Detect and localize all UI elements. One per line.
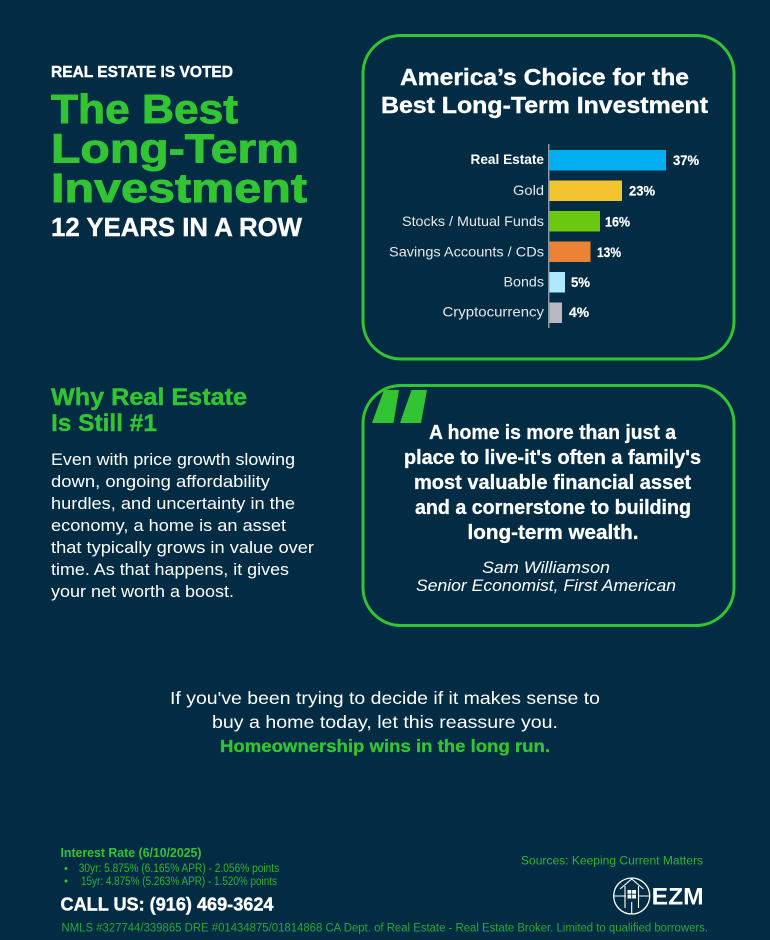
quote text: long-term wealth.: [468, 522, 638, 544]
sources: Sources: Keeping Current Matters: [521, 856, 703, 868]
heading: why real estate is still #1: Is Still #1: [51, 410, 157, 437]
bar chart: [389, 144, 700, 328]
text block: why explanation: hurdles, and uncertainty in the: [51, 495, 295, 513]
bar chart: 16%: [605, 214, 630, 230]
icon: EZM logo: EZM: [652, 884, 704, 910]
icon: quotation marks: [372, 390, 427, 423]
text block: why explanation: that typically grows in value over: [51, 539, 315, 557]
bar chart: 5%: [571, 274, 591, 290]
chart title: America’s Choice for the: [400, 64, 689, 90]
chart title: Best Long-Term Investment: [381, 92, 708, 118]
quote attribution: Senior Economist, First American: [416, 576, 676, 595]
bar chart: 37%: [673, 152, 700, 168]
bar chart: Stocks / Mutual Funds: [402, 213, 544, 229]
bar chart: Bonds: [504, 274, 544, 290]
text block: closing message: [170, 688, 600, 756]
text block: closing message: If you've been trying to decide if it makes sense to: [170, 688, 600, 708]
text block: interest rates: [60, 846, 279, 888]
text block: why explanation: Even with price growth slowing: [51, 451, 295, 469]
panel: America's choice chart: [363, 36, 734, 359]
call to action phone number: CALL US: (916) 469-3624: [60, 894, 274, 914]
bar chart: Cryptocurrency: [442, 304, 544, 320]
heading: real estate is voted the best long-term investment: [51, 64, 307, 242]
text block: why explanation: your net worth a boost.: [51, 583, 234, 601]
text block: interest rates: Interest Rate (6/10/2025): [60, 846, 202, 860]
text block: interest rates: 30yr: 5.875% (6.165% APR) - 2.056% points: [79, 863, 279, 875]
panel: quote: [363, 386, 734, 626]
heading: why real estate is still #1: Why Real Estate: [51, 384, 247, 411]
bar chart: Gold: [513, 182, 544, 198]
bar chart: 23%: [629, 182, 656, 198]
text block: why explanation: economy, a home is an asset: [51, 517, 286, 535]
icon: EZM logo: [614, 878, 704, 914]
bar chart: 4%: [569, 304, 590, 320]
quote text: [404, 422, 701, 544]
quote text: most valuable financial asset: [414, 472, 691, 494]
text block: why explanation: [51, 451, 315, 601]
heading: real estate is voted the best long-term investment: Long-Term: [51, 126, 299, 172]
bar chart: Savings Accounts / CDs: [389, 244, 544, 260]
text block: why explanation: down, ongoing affordability: [51, 473, 271, 491]
text block: closing message: Homeownership wins in the long run.: [220, 736, 550, 756]
bar chart: Real Estate: [470, 151, 544, 167]
heading: real estate is voted the best long-term investment: Investment: [51, 165, 307, 211]
text block: interest rates: 15yr: 4.875% (5.263% APR) - 1.520% points: [81, 876, 277, 888]
bar chart: 13%: [597, 244, 621, 260]
text block: closing message: buy a home today, let this reassure you.: [212, 712, 558, 732]
heading: real estate is voted the best long-term investment: 12 YEARS IN A ROW: [51, 212, 302, 242]
heading: why real estate is still #1: [51, 384, 247, 437]
quote text: place to live-it's often a family's: [404, 447, 701, 469]
legal disclaimer: NMLS #327744/339865 DRE #01434875/01814868 CA Dept. of Real Estate - Real Estate Broker. Limited to qualified borrowers.: [62, 922, 708, 934]
quote attribution: [416, 558, 676, 595]
heading: real estate is voted the best long-term investment: REAL ESTATE IS VOTED: [51, 64, 233, 81]
chart title: [381, 64, 708, 118]
quote text: A home is more than just a: [429, 422, 677, 444]
quote text: and a cornerstone to building: [415, 497, 691, 519]
heading: real estate is voted the best long-term investment: The Best: [51, 86, 238, 132]
text block: why explanation: time. As that happens, it gives: [51, 561, 289, 579]
quote attribution: Sam Williamson: [482, 558, 610, 577]
